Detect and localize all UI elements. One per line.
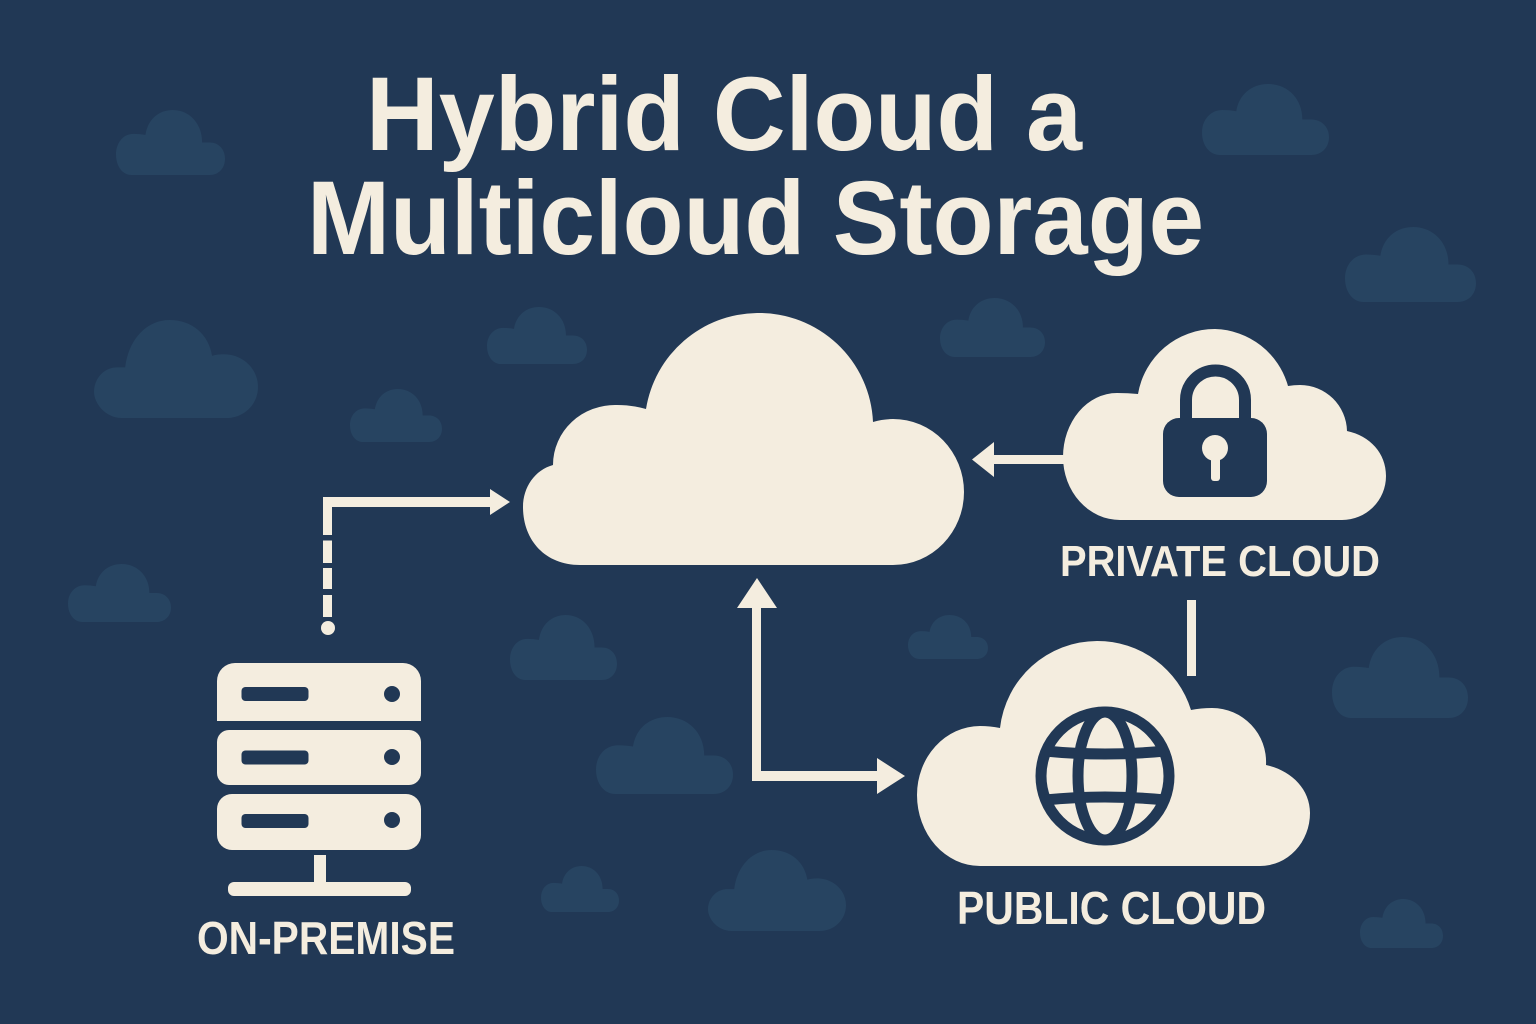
- title: Hybrid Cloud a: [366, 56, 1084, 173]
- title: [307, 56, 1204, 277]
- central cloud: [523, 313, 964, 565]
- icon: globe: [1041, 712, 1169, 840]
- arrow: private cloud to central cloud: [972, 442, 1066, 477]
- public cloud icon: [917, 641, 1310, 866]
- on-premise label: ON-PREMISE: [197, 912, 455, 964]
- public cloud label: PUBLIC CLOUD: [957, 882, 1266, 934]
- arrow: on-premise to central cloud: [321, 489, 510, 635]
- icon: padlock: [1163, 370, 1267, 497]
- title: Multicloud Storage: [307, 160, 1204, 277]
- private cloud icon: [1063, 329, 1386, 520]
- icon: on-premise server stack: [217, 663, 421, 896]
- connector: private to public cloud: [1187, 600, 1196, 676]
- private cloud label: PRIVATE CLOUD: [1060, 537, 1380, 586]
- background clouds: [68, 84, 1476, 948]
- arrow: central cloud and public cloud two-way: [737, 578, 905, 794]
